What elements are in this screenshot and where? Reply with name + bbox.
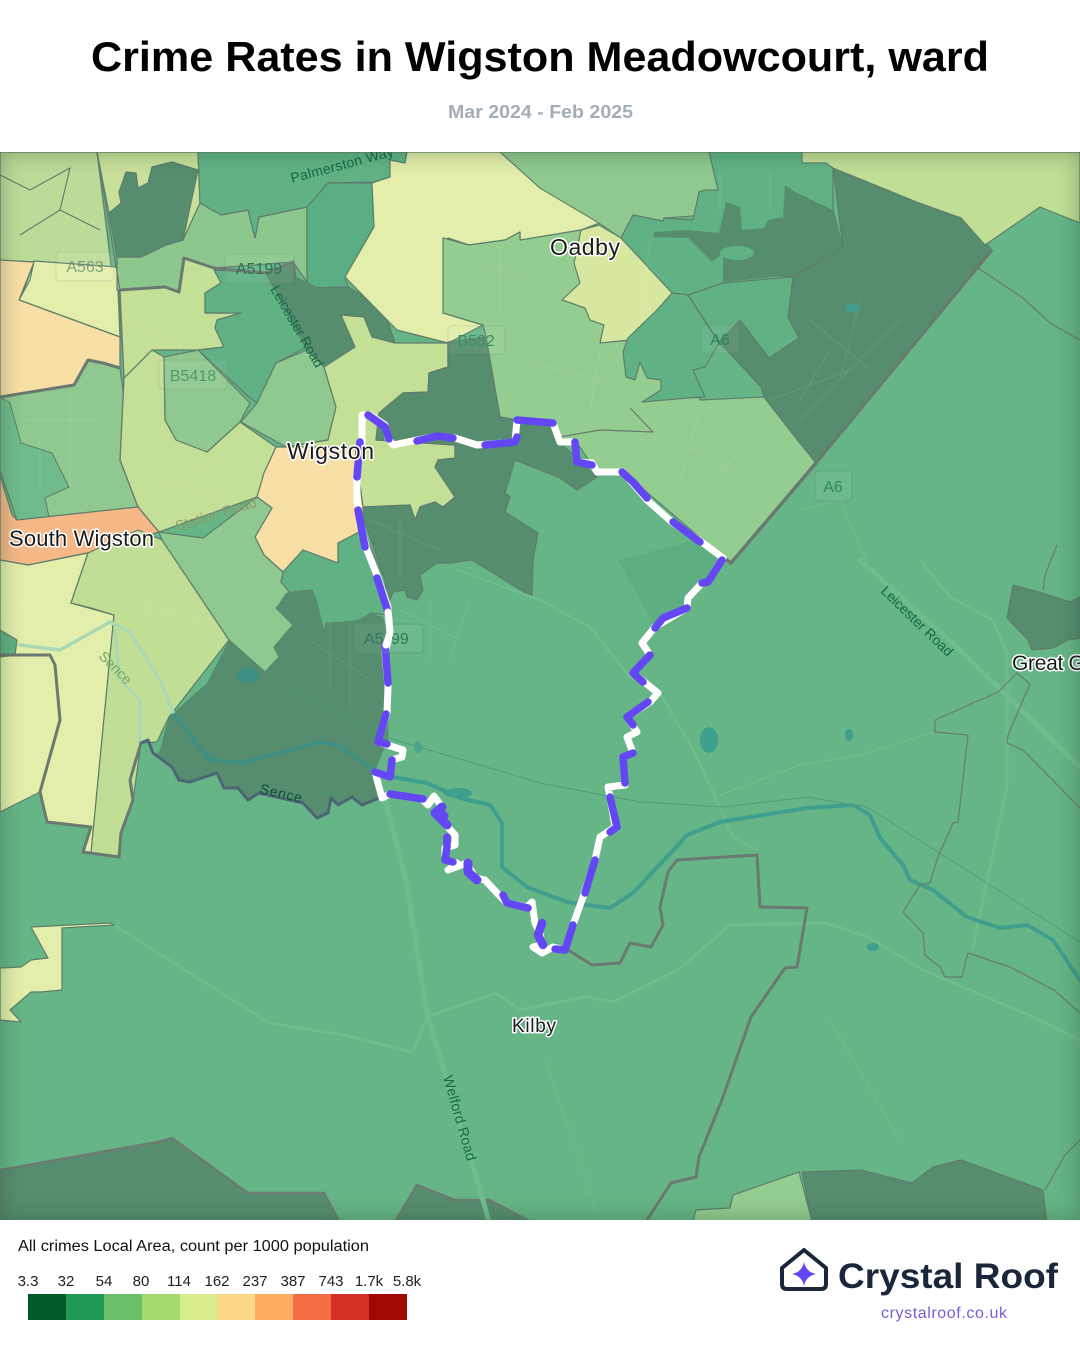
place labels (9, 234, 1080, 1037)
dark area top left (109, 162, 198, 257)
road network (117, 500, 1080, 1225)
rivers (20, 622, 1080, 980)
local area boundaries (0, 152, 1080, 1220)
road number badges: A563 (66, 259, 104, 276)
road name labels: Leicester Road (267, 282, 327, 370)
road name labels: Leicester Road (878, 583, 957, 659)
legend tick labels: 5.8k (393, 1273, 422, 1290)
place labels: South Wigston (9, 526, 154, 551)
legend tick labels: 54 (96, 1273, 112, 1290)
subtitle: Mar 2024 - Feb 2025 (448, 102, 633, 122)
legend tick labels: 114 (167, 1273, 191, 1290)
place labels: Kilby (512, 1016, 556, 1037)
road number badges: B582 (457, 333, 495, 350)
road name labels (96, 143, 957, 1162)
legend title: All crimes Local Area, count per 1000 population (18, 1238, 369, 1255)
road number badges (56, 252, 852, 653)
ponds (238, 304, 879, 951)
wordmark: Crystal Roof (838, 1257, 1058, 1296)
road number badges: B5418 (170, 368, 216, 385)
violet ward dashes (357, 415, 722, 950)
title and subtitle (91, 33, 989, 122)
legend tick labels: 3.3 (18, 1273, 38, 1290)
road name labels: Palmerston Way (289, 143, 395, 186)
map panel (0, 152, 1080, 1220)
road name labels: Sence (258, 780, 304, 806)
icon: house with star (782, 1250, 826, 1289)
legend (18, 1238, 422, 1320)
choropleth areas (0, 152, 1080, 1225)
road name labels: Station Road (173, 494, 258, 534)
ward boundary (357, 415, 723, 953)
road number badges: A6 (823, 479, 843, 496)
legend tick labels: 743 (318, 1273, 344, 1290)
road number badges: A5199 (236, 261, 282, 278)
legend colour scale (28, 1294, 407, 1320)
urban street texture (20, 170, 900, 710)
legend tick labels: 1.7k (355, 1273, 384, 1290)
legend tick labels: 162 (204, 1273, 230, 1290)
road name labels: Sence (96, 648, 136, 688)
map edge vignette (0, 152, 1080, 1220)
road name labels: Welford Road (440, 1073, 480, 1162)
title: Crime Rates in Wigston Meadowcourt, ward (91, 33, 989, 80)
road number badges: 99 (391, 631, 409, 648)
road number badges: A5 (364, 631, 384, 648)
place labels: Oadby (550, 234, 620, 260)
white ward outline (357, 415, 723, 953)
legend tick labels: 237 (242, 1273, 268, 1290)
repaint white outline across the A5199 badge (386, 612, 390, 645)
website: crystalroof.co.uk (881, 1305, 1008, 1322)
railway line (265, 672, 1080, 942)
legend tick labels (18, 1273, 422, 1290)
legend tick labels: 387 (280, 1273, 306, 1290)
dark area north east of Oadby (654, 185, 843, 282)
road number badges: A6 (710, 332, 730, 349)
logo (780, 1248, 1058, 1322)
place labels: Wigston (287, 438, 374, 464)
legend tick labels: 32 (58, 1273, 74, 1290)
legend tick labels: 80 (133, 1273, 149, 1290)
